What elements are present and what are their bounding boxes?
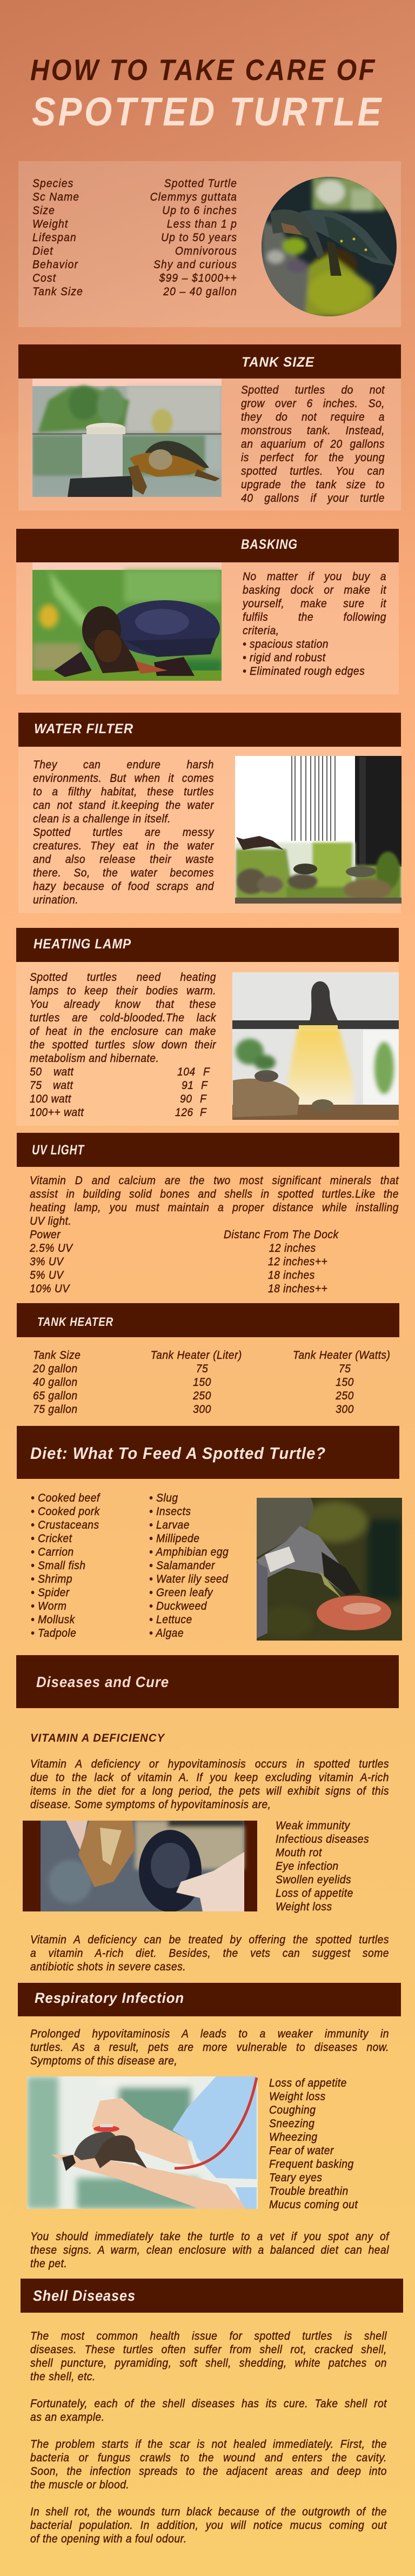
tank size text [241, 383, 385, 504]
fact values: Clemmys guttata [150, 190, 237, 203]
fact labels [32, 177, 83, 298]
basking text [242, 570, 387, 678]
heading: basking: BASKING [241, 537, 298, 552]
symptom list [276, 1819, 389, 1914]
fact values: Up to 6 inches [162, 204, 237, 217]
water filter text: and also release their waste [33, 853, 214, 866]
heater table: liter: 75 [196, 1362, 208, 1375]
shell text 4 [30, 2505, 387, 2546]
food list 2: • Insects [149, 1505, 191, 1518]
vitamin a text [30, 1757, 389, 1811]
heater table: watts: 75 [339, 1362, 351, 1375]
shell text 2 [30, 2397, 387, 2424]
fact values: Less than 1 p [167, 217, 237, 230]
tank size text: is perfect for the young [241, 451, 385, 464]
food list 2: • Amphibian egg [149, 1545, 229, 1558]
shell text 2: Fortunately, each of the shell diseases has its cure. Take shell rot [30, 2397, 387, 2410]
heading: shell diseases [21, 2279, 403, 2313]
symptom list: Fear of water [269, 2144, 334, 2157]
basking text: No matter if you buy a [243, 570, 386, 583]
food list 1: • Worm [31, 1599, 66, 1612]
heater table: watts: Tank Heater (Watts) [293, 1349, 390, 1362]
fact values: $99 – $1000++ [159, 271, 237, 284]
heading: water filter: WATER FILTER [34, 721, 133, 736]
food list 1 [31, 1491, 101, 1639]
tank size text: monstrous tank. Instead, [241, 424, 385, 437]
section: vitamin a deficiency [23, 1732, 389, 1973]
symptom list: Trouble breathin [269, 2185, 349, 2197]
fact values: 20 – 40 gallon [163, 285, 237, 298]
food list 2: • Millipede [149, 1532, 199, 1545]
wattage table: 126 [175, 1106, 193, 1119]
shell text 3: Soon, the infection spreads to the adjacent areas and deep into [30, 2465, 387, 2478]
symptom list: Teary eyes [269, 2171, 322, 2184]
heading: tank size [18, 344, 401, 379]
wattage table: F [200, 1092, 206, 1105]
photo: two turtles held in hands [23, 1821, 257, 1911]
uv light text: heating lamp, you must maintain a proper distance while installing [30, 1201, 399, 1214]
uv light text: assist in building solid bones and shells in spotted turtles.Like the [30, 1187, 399, 1200]
heater table: watts [293, 1349, 390, 1416]
symptom list: Eye infection [276, 1860, 339, 1873]
heating lamp text: of heat in the enclosure can make [30, 1025, 216, 1038]
heading: respiratory infection [18, 1983, 401, 2016]
tank size text: grow over 6 inches. So, [241, 397, 385, 410]
heading: diseases and cure [16, 1655, 399, 1708]
heading: tank heater [17, 1303, 399, 1337]
shell text 3: the muscle or blood. [30, 2478, 129, 2491]
uv distance column: 12 inches++ [268, 1255, 327, 1268]
food list 1: • Carrion [31, 1545, 74, 1558]
vitamin a text: items in the diet for a long period, the pets will exhibit signs of this [30, 1784, 389, 1797]
heading: diseases and cure: Diseases and Cure [36, 1674, 169, 1690]
respiratory treatment text: these signs. A warm, clean enclosure with a balanced diet can heal [30, 2243, 389, 2256]
water filter text: urination. [33, 893, 78, 906]
heating lamp text: metabolism and hibernate. [30, 1052, 159, 1065]
uv distance column: 18 inches [268, 1269, 315, 1282]
uv power column: Power [30, 1228, 61, 1241]
uv power column: 10% UV [30, 1282, 70, 1295]
water filter text: clean is a challenge in itself. [33, 812, 171, 825]
vitamin a text: due to the lack of vitamin A. If you keep excluding vitamin A-rich [30, 1771, 389, 1784]
fact values: Up to 50 years [161, 231, 237, 244]
respiratory text: turtles. As a result, pets are more vulnerable to diseases now. [30, 2041, 389, 2054]
food list 2: • Duckweed [149, 1599, 207, 1612]
wattage table: 100++ watt [30, 1106, 84, 1119]
heating lamp text: turtles are cold-blooded.The lack [30, 1011, 216, 1024]
shell text 4: bacterial population. In addition, you will notice mucus coming out [30, 2519, 387, 2532]
vitamin a treatment text: antibiotic shots in severe cases. [30, 1960, 186, 1973]
symptom list [269, 2076, 393, 2212]
fact labels: Species [32, 177, 73, 190]
uv power column: 2.5% UV [30, 1241, 73, 1254]
vitamin a text: Vitamin A deficiency or hypovitaminosis occurs in spotted turtles [30, 1757, 389, 1770]
section: basking [16, 529, 399, 694]
heading: uv light: UV LIGHT [32, 1143, 85, 1158]
heating lamp text [30, 971, 217, 1065]
wattage table: 90 [180, 1092, 192, 1105]
water filter text: creatures. They eat in the water [33, 839, 214, 852]
wattage table: 50 [30, 1065, 42, 1078]
section: shell diseases [21, 2279, 403, 2547]
fact labels: Sc Name [32, 190, 79, 203]
symptom list: Wheezing [269, 2130, 318, 2143]
fact labels: Diet [32, 244, 53, 257]
fact labels: Tank Size [32, 285, 83, 298]
section: respiratory infection [18, 1983, 401, 2258]
section: uv light [17, 1133, 399, 1295]
heater table: liter: Tank Heater (Liter) [151, 1349, 242, 1362]
uv light text: Vitamin D and calcium are the two most significant minerals that [30, 1174, 399, 1187]
heater table: liter: 150 [193, 1376, 211, 1389]
symptom list: Infectious diseases [276, 1833, 369, 1845]
shell text 1: The most common health issue for spotted turtles is shell [30, 2329, 387, 2342]
heating lamp text: lamps to keep their bodies warm. [30, 984, 216, 997]
photo: turtle eating [257, 1498, 402, 1641]
wattage table [30, 1065, 210, 1119]
tank size text: upgrade the tank size to [241, 478, 385, 491]
food list 2: • Green leafy [149, 1586, 213, 1599]
fact values: Omnivorous [175, 244, 237, 257]
water filter text: there. So, the water becomes [33, 866, 214, 879]
uv light text [30, 1174, 399, 1227]
section: water filter [18, 713, 401, 913]
food list 2: • Larvae [149, 1518, 190, 1531]
heater table: tank size: 20 gallon [33, 1362, 78, 1375]
basking text: yourself, make sure it [243, 597, 386, 610]
shell text 3: The problem starts if the scar is not healed immediately. First, the [30, 2438, 387, 2451]
food list 1: • Crustaceans [31, 1518, 99, 1531]
food list 1: • Cricket [31, 1532, 72, 1545]
water filter text: environments. But when it comes [33, 772, 214, 785]
uv power column: 3% UV [30, 1255, 63, 1268]
water filter text: to a filthy habitat, these turtles [33, 785, 214, 798]
basking text: • Eliminated rough edges [243, 665, 365, 678]
heating lamp text: Spotted turtles need heating [30, 971, 216, 984]
food list 2: • Algae [149, 1626, 184, 1639]
wattage table: 75 [30, 1079, 42, 1092]
shell text 1: diseases. These turtles often suffer from shell rot, cracked shell, [30, 2343, 387, 2356]
symptom list: Loss of appetite [269, 2076, 347, 2089]
section: heating lamp [16, 928, 399, 1126]
title: HOW TO TAKE CARE OF [30, 53, 377, 87]
food list 2: • Water lily seed [149, 1572, 228, 1585]
heater table: watts: 300 [336, 1403, 354, 1416]
shell text 1 [30, 2329, 387, 2384]
fact values: Shy and curious [153, 258, 237, 271]
wattage table: watt [53, 1079, 73, 1092]
heading: water filter [18, 713, 401, 747]
food list 1: • Small fish [31, 1559, 85, 1572]
heading: heating lamp [16, 928, 399, 962]
food list 1: • Mollusk [31, 1613, 75, 1626]
shell text 1: the shell, etc. [30, 2370, 96, 2383]
food list 1: • Spider [31, 1586, 70, 1599]
heading: respiratory infection: Respiratory Infection [35, 1990, 184, 2006]
photo: turtle on moss [32, 562, 222, 681]
respiratory treatment text: You should immediately take the turtle to a vet if you spot any of [30, 2230, 389, 2243]
basking text: • spacious station [243, 638, 329, 650]
photo: heat lamp over terrarium [232, 972, 399, 1120]
tank size text: an aquarium of 20 gallons [241, 437, 385, 450]
basking text: criteria, [243, 624, 279, 637]
symptom list: Swollen eyelids [276, 1873, 351, 1886]
heater table: liter: 250 [193, 1389, 211, 1402]
food list 2 [149, 1491, 229, 1639]
symptom list: Loss of appetite [276, 1887, 353, 1900]
fact labels: Cost [32, 271, 56, 284]
heater table: watts: 250 [336, 1389, 354, 1402]
respiratory text: Prolonged hypovitaminosis A leads to a weaker immunity in [30, 2027, 389, 2040]
wattage table: F [203, 1065, 210, 1078]
photo: vet examining turtle [27, 2076, 258, 2209]
photo: aquarium with filter [235, 756, 401, 904]
heating lamp text: the spotted turtles slow down their [30, 1038, 216, 1051]
food list 2: • Salamander [149, 1559, 215, 1572]
section: tank heater [17, 1303, 399, 1416]
wattage table: 91 [182, 1079, 193, 1092]
shell text 4: In shell rot, the wounds turn black because of the outgrowth of the [30, 2505, 387, 2518]
symptom list: Sneezing [269, 2117, 314, 2130]
heater table: liter [151, 1349, 242, 1416]
heading: uv light [17, 1133, 399, 1167]
water filter text: can not stand it.keeping the water [33, 799, 214, 812]
uv distance column [224, 1228, 339, 1295]
respiratory text [30, 2027, 389, 2068]
fact labels: Size [32, 204, 55, 217]
heater table: tank size: 65 gallon [33, 1389, 78, 1402]
heading: tank size: TANK SIZE [242, 355, 314, 370]
uv power column: 5% UV [30, 1269, 63, 1282]
heater table: tank size: 75 gallon [33, 1403, 78, 1416]
photo: spotted turtle in circle [262, 177, 397, 316]
respiratory treatment text: the pet. [30, 2257, 67, 2270]
heater table: liter: 300 [193, 1403, 211, 1416]
vitamin a text: disease. Some symptoms of hypovitaminosis are, [30, 1798, 271, 1811]
heating lamp text: You already know that these [30, 998, 216, 1011]
heater table: watts: 150 [336, 1376, 354, 1389]
photo: turtle in aquarium [32, 379, 222, 497]
food list 2: • Lettuce [149, 1613, 192, 1626]
food list 2: • Slug [149, 1491, 178, 1504]
vitamin a treatment text: Vitamin A deficiency can be treated by offering the spotted turtles [30, 1933, 389, 1946]
food list 1: • Tadpole [31, 1626, 76, 1639]
tank size text: Spotted turtles do not [241, 383, 385, 396]
subheading: vitamin a deficiency: VITAMIN A DEFICIENCY [30, 1732, 165, 1744]
fact labels: Behavior [32, 258, 78, 271]
heading: shell diseases: Shell Diseases [33, 2287, 136, 2304]
heading: basking [16, 529, 399, 562]
title: SPOTTED TURTLE [32, 89, 384, 134]
water filter text: They can endure harsh [33, 758, 214, 771]
panel: quick facts [18, 161, 401, 327]
heading: diet [17, 1426, 399, 1479]
title [30, 53, 384, 134]
symptom list: Mouth rot [276, 1846, 322, 1859]
fact values: Spotted Turtle [164, 177, 237, 190]
shell text 3: bacteria or fungus crawls to the wound and enters the cavity. [30, 2451, 387, 2464]
heater table: tank size: Tank Size [33, 1349, 81, 1362]
respiratory text: Symptoms of this disease are, [30, 2054, 177, 2067]
heater table: tank size [32, 1349, 81, 1416]
fact values [150, 177, 237, 298]
wattage table: F [201, 1079, 208, 1092]
water filter text: Spotted turtles are messy [33, 826, 214, 839]
food list 1: • Cooked pork [31, 1505, 100, 1518]
uv light text: UV light. [30, 1214, 71, 1227]
wattage table: F [200, 1106, 206, 1119]
wattage table: 104 [177, 1065, 196, 1078]
heading: diet: Diet: What To Feed A Spotted Turtle? [30, 1444, 326, 1463]
shell text 3 [30, 2438, 387, 2492]
water filter text [33, 758, 215, 906]
vitamin a treatment text: a vitamin A-rich diet. Besides, the vets can suggest some [30, 1947, 389, 1960]
basking text: • rigid and robust [243, 651, 326, 664]
symptom list: Weight loss [276, 1900, 332, 1913]
tank size text: spotted turtles. You can [241, 464, 385, 477]
food list 1: • Cooked beef [31, 1491, 100, 1504]
vitamin a treatment text [30, 1933, 389, 1974]
section: tank size [18, 344, 401, 510]
heading: tank heater: TANK HEATER [37, 1315, 113, 1329]
tank size text: they do not require a [241, 410, 385, 423]
wattage table: 100 watt [30, 1092, 71, 1105]
shell text 1: shell puncture, pyramiding, soft shell, shedding, white patches on [30, 2356, 387, 2369]
fact labels: Weight [32, 217, 68, 230]
heading: heating lamp: HEATING LAMP [34, 937, 131, 952]
wattage table: watt [53, 1065, 73, 1078]
section: diet [17, 1426, 402, 1641]
symptom list: Weight loss [269, 2090, 326, 2103]
water filter text: hazy because of food scraps and [33, 880, 214, 893]
fact labels: Lifespan [32, 231, 77, 244]
symptom list: Frequent basking [269, 2157, 354, 2170]
symptom list: Mucus coming out [269, 2198, 358, 2211]
tank size text: 40 gallons if your turtle [241, 492, 385, 504]
symptom list: Coughing [269, 2103, 316, 2116]
shell text 2: as an example. [30, 2411, 105, 2424]
food list 1: • Shrimp [31, 1572, 72, 1585]
uv distance column: 12 inches [269, 1241, 316, 1254]
basking text: basking dock or make it [243, 583, 386, 596]
basking text: fulfils the following [243, 610, 386, 623]
heater table: tank size: 40 gallon [33, 1376, 78, 1389]
symptom list: Weak immunity [276, 1819, 350, 1832]
uv distance column: Distanc From The Dock [224, 1228, 339, 1241]
uv power column [29, 1228, 73, 1295]
respiratory treatment text [30, 2230, 389, 2270]
uv distance column: 18 inches++ [268, 1282, 327, 1295]
shell text 4: of the opening with a foul odour. [30, 2532, 187, 2545]
